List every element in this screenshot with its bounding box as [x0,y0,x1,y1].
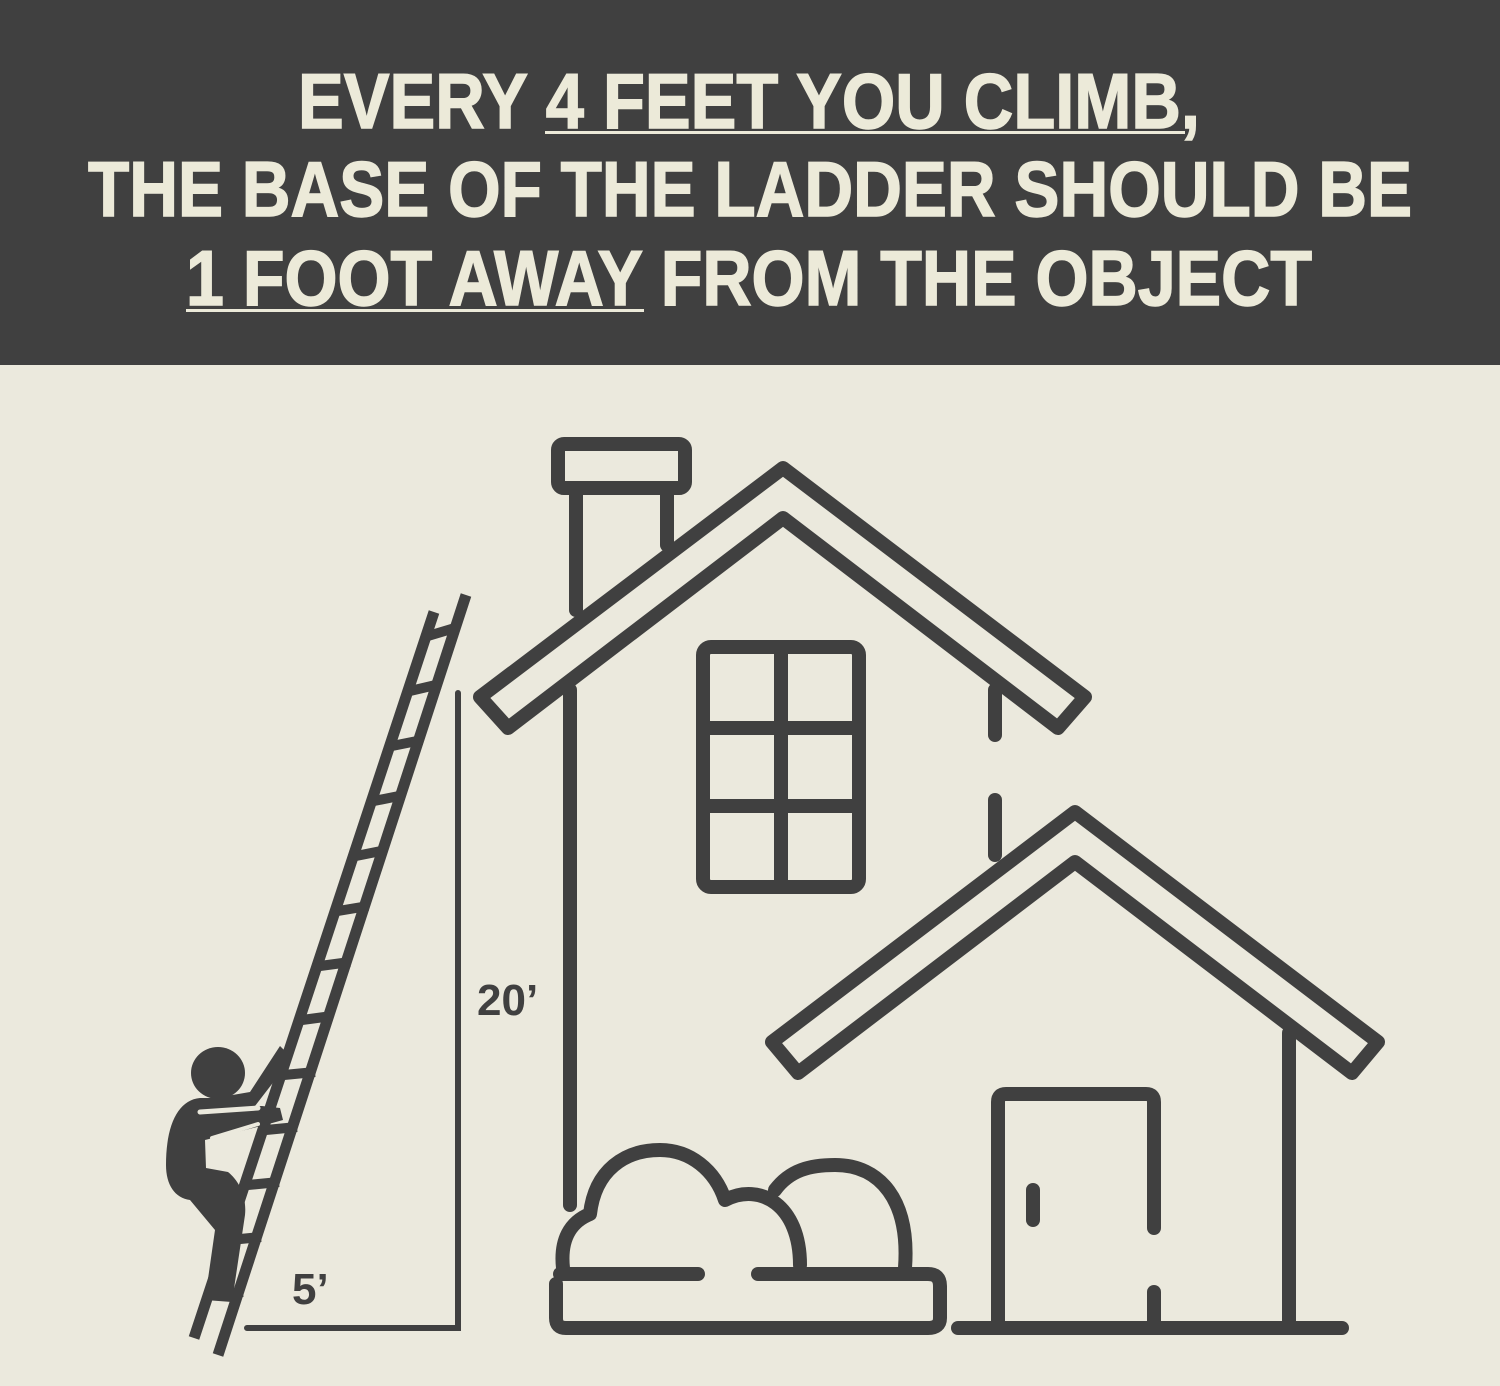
ground line [958,1321,1342,1335]
climbing person [166,1046,292,1302]
small house wall [1282,1033,1296,1326]
label: 5 ft: 5’ [292,1265,329,1314]
small house roof [772,812,1378,1073]
illustration: house [480,444,1378,1328]
title: 1 FOOT AWAY FROM THE OBJECT [186,234,1312,322]
main roof [480,468,1085,728]
door [998,1094,1154,1326]
main walls [570,690,995,1205]
window [703,647,859,887]
chimney [558,444,685,610]
label: 20 ft: 20’ [477,976,538,1025]
title [88,57,1412,322]
dimension lines [247,693,458,1328]
header banner [0,0,1500,365]
bushes [556,1150,940,1328]
ladder [194,595,466,1355]
title: EVERY 4 FEET YOU CLIMB, [298,57,1200,145]
